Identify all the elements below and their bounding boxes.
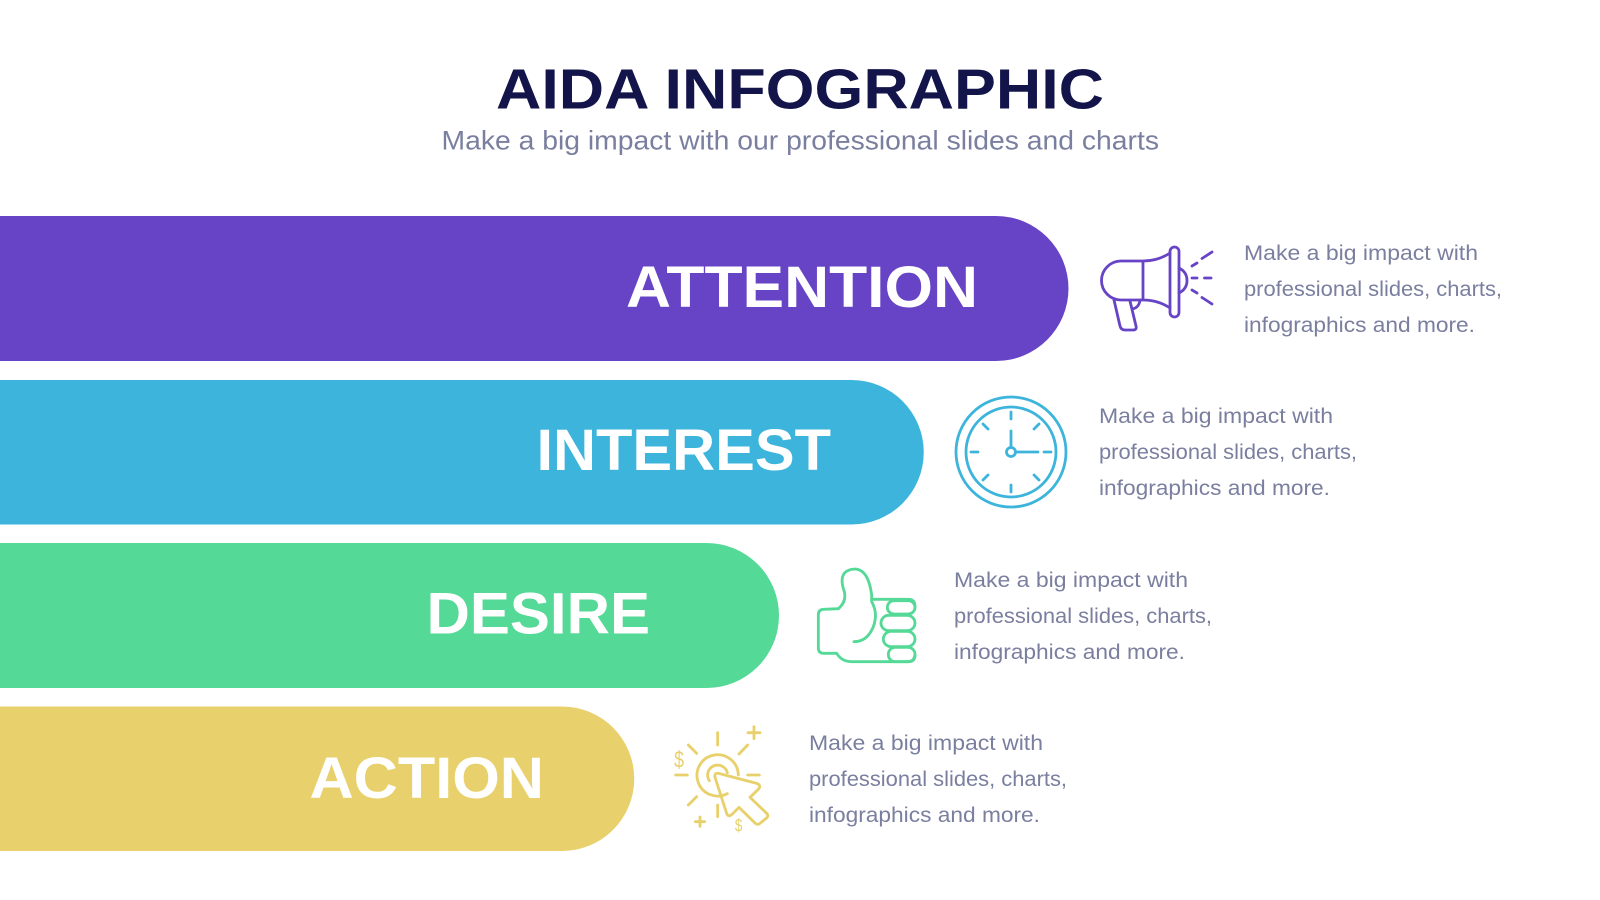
attention band	[0, 216, 1068, 361]
attention description: professional slides, charts,	[1244, 277, 1502, 301]
panel: attention	[0, 216, 1502, 361]
desire description: professional slides, charts,	[954, 604, 1212, 628]
desire description: Make a big impact with	[954, 568, 1188, 592]
action description: professional slides, charts,	[809, 767, 1067, 791]
desire description	[954, 568, 1212, 664]
interest description: professional slides, charts,	[1099, 440, 1357, 464]
icon: clock	[956, 397, 1066, 507]
subtitle: Make a big impact with our professional slides and charts	[442, 126, 1159, 156]
attention description: Make a big impact with	[1244, 241, 1478, 265]
action description: infographics and more.	[809, 803, 1040, 827]
icon: thumbs up	[818, 569, 915, 662]
interest description: infographics and more.	[1099, 476, 1330, 500]
interest label: INTEREST	[536, 418, 831, 483]
desire description: infographics and more.	[954, 640, 1185, 664]
desire band	[0, 543, 779, 688]
interest band	[0, 380, 924, 524]
action band	[0, 706, 634, 851]
action description: Make a big impact with	[809, 731, 1043, 755]
title: AIDA INFOGRAPHIC	[496, 58, 1104, 120]
icon: click cursor: $	[735, 817, 743, 836]
panel: action	[0, 706, 1067, 851]
action label: ACTION	[310, 746, 544, 811]
icon: click cursor	[674, 727, 768, 836]
action description	[809, 731, 1067, 827]
interest description: Make a big impact with	[1099, 404, 1333, 428]
desire label: DESIRE	[426, 582, 650, 646]
icon: click cursor: $	[674, 748, 684, 773]
attention label: ATTENTION	[626, 255, 978, 320]
attention description: infographics and more.	[1244, 313, 1475, 337]
panel: desire	[0, 543, 1212, 688]
interest description	[1099, 404, 1357, 500]
attention description	[1244, 241, 1502, 337]
icon: megaphone	[1102, 247, 1212, 330]
panel: interest	[0, 380, 1357, 524]
